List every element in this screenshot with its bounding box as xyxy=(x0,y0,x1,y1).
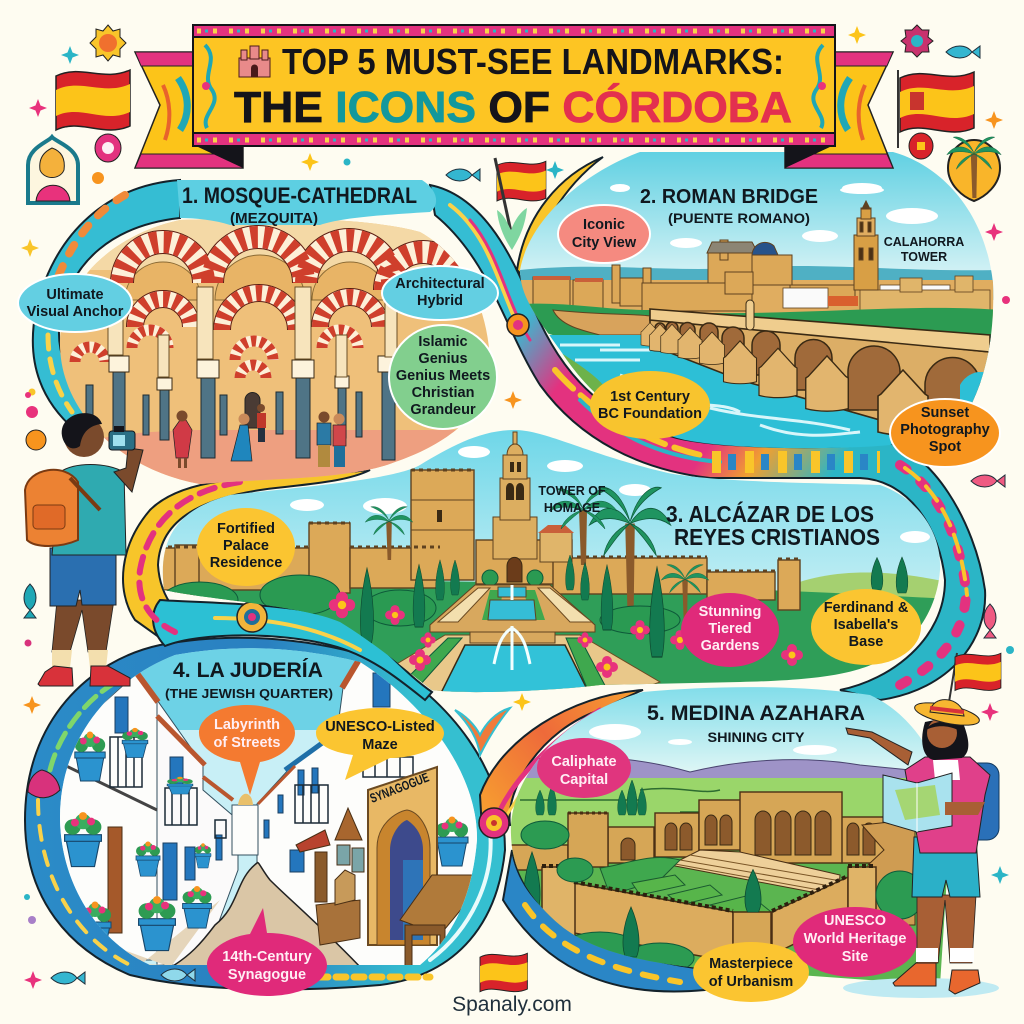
heading: 5. Medina Azahara: 5. MEDINA AZAHARA xyxy=(647,702,865,725)
backpack xyxy=(966,763,999,840)
callout: Fortified Palace Residence: Palace xyxy=(223,538,269,554)
banner side scrolls xyxy=(202,45,826,128)
callout: 1st Century BC Foundation xyxy=(590,371,710,439)
callout: Islamic Genius Meets Christian Grandeur: Christian xyxy=(412,385,474,401)
callout: Islamic Genius Meets Christian Grandeur: Genius xyxy=(418,351,468,367)
scene: ruins xyxy=(510,687,946,980)
traveller with map xyxy=(843,698,999,998)
callout: Ultimate Visual Anchor xyxy=(18,274,132,332)
callout: Fortified Palace Residence: Fortified xyxy=(217,521,275,537)
callout: Masterpiece of Urbanism: Masterpiece xyxy=(709,956,793,972)
callout: Islamic Genius Meets Christian Grandeur: Islamic xyxy=(418,334,468,350)
callout: Iconic City View: City View xyxy=(572,235,637,251)
callout: Architectural Hybrid xyxy=(382,266,498,320)
callout: UNESCO-Listed Maze xyxy=(316,708,444,780)
camera xyxy=(109,426,135,450)
icon: fish bottom xyxy=(161,969,195,981)
ribbon tails xyxy=(135,52,893,168)
pots xyxy=(75,732,105,781)
title text: TOP 5 MUST-SEE LANDMARKS: xyxy=(282,41,784,82)
icon: palm medallion xyxy=(947,137,1001,201)
ribbon: panel 3 lower teal xyxy=(153,600,432,700)
bushes xyxy=(162,570,680,634)
callout: Labyrinth of Streets: of Streets xyxy=(214,735,280,751)
callout: Ultimate Visual Anchor: Ultimate xyxy=(46,287,104,303)
label: Calahorra Tower: CALAHORRA xyxy=(884,235,964,249)
flag: center xyxy=(495,158,546,250)
ribbon: panel 3 yellow xyxy=(123,470,370,645)
tower and gardens xyxy=(568,813,608,867)
crumbling wall xyxy=(862,820,915,925)
callout: Caliphate Capital: Capital xyxy=(560,772,608,788)
icon: round medallion xyxy=(95,134,121,162)
callout: Iconic City View xyxy=(558,205,650,263)
Calahorra tower xyxy=(854,201,878,290)
callout: Sunset Photography Spot xyxy=(890,399,1000,467)
heading: 5. Medina Azahara: SHINING CITY xyxy=(708,730,804,745)
callout: Stunning Tiered Gardens xyxy=(681,593,779,667)
callout: Fortified Palace Residence: Residence xyxy=(210,555,282,571)
hand on map xyxy=(945,802,985,815)
legs xyxy=(917,895,976,963)
title banner xyxy=(135,25,893,168)
callout: 14th-Century Synagogue: Synagogue xyxy=(228,967,306,983)
callout: Architectural Hybrid: Hybrid xyxy=(417,293,463,309)
callout: Sunset Photography Spot: Photography xyxy=(900,422,990,438)
icon: small red medallion xyxy=(909,133,933,159)
heading: 5. Medina Azahara xyxy=(647,702,865,745)
callout: Masterpiece of Urbanism: of Urbanism xyxy=(709,974,793,990)
flag: right of panel 5 xyxy=(949,653,1001,702)
heading band and title: 1. Mosque-Cathedral xyxy=(177,180,436,227)
callout: 14th-Century Synagogue xyxy=(207,908,327,996)
callout: UNESCO World Heritage Site: World Heritage xyxy=(804,931,906,947)
columns xyxy=(86,372,395,460)
trees xyxy=(521,821,924,973)
heading: 4. La Judería xyxy=(165,659,333,701)
icon: fish lower right xyxy=(984,604,996,638)
left houses xyxy=(60,674,156,960)
label: Tower of Homage: TOWER OF xyxy=(538,484,606,498)
tourists xyxy=(173,404,346,468)
bridge xyxy=(641,300,990,435)
street xyxy=(173,862,363,970)
title text: THE ICONS OF CÓRDOBA xyxy=(234,82,792,132)
legs and shoes xyxy=(38,600,130,686)
head xyxy=(64,417,104,457)
ornament: ribbon medallions xyxy=(28,314,529,838)
icon: ornaments top right xyxy=(901,25,933,57)
ribbon: panel 5 orange xyxy=(480,690,643,830)
shirt xyxy=(52,464,126,555)
callout: Fortified Palace Residence xyxy=(197,508,295,586)
scene: Córdoba skyline and bridge xyxy=(510,150,1000,455)
callout: Stunning Tiered Gardens: Gardens xyxy=(701,638,759,654)
callout: Caliphate Capital: Caliphate xyxy=(551,754,617,770)
awning and shop items xyxy=(296,808,473,975)
palms xyxy=(589,487,671,617)
map xyxy=(883,773,952,832)
callout: Stunning Tiered Gardens: Tiered xyxy=(708,621,752,637)
callout: 1st Century BC Foundation: 1st Century xyxy=(610,389,690,405)
scene: Alcázar and gardens xyxy=(162,430,940,692)
head and hair xyxy=(922,715,968,760)
callout: Labyrinth of Streets xyxy=(199,705,295,795)
icon: sun xyxy=(90,25,126,61)
label: Calahorra Tower xyxy=(884,235,964,264)
flag: bottom xyxy=(480,953,527,992)
callout: Architectural Hybrid: Architectural xyxy=(395,276,485,292)
heading: 3. Alcázar de los Reyes Cristianos: 3. ALCÁZAR DE LOS xyxy=(666,500,874,527)
far house xyxy=(232,805,258,855)
heading: 3. Alcázar de los Reyes Cristianos: REYES CRISTIANOS xyxy=(674,524,880,550)
terraces and pools xyxy=(430,585,595,632)
heading band and title: 1. Mosque-Cathedral: (MEZQUITA) xyxy=(230,210,318,227)
arm xyxy=(846,728,912,765)
heading: 4. La Judería: 4. LA JUDERÍA xyxy=(173,659,323,682)
label: Tower of Homage xyxy=(538,484,606,515)
icon: fish top right xyxy=(946,46,980,58)
arm xyxy=(114,448,143,492)
callout: Sunset Photography Spot: Sunset xyxy=(921,405,969,421)
decorative ribbon system xyxy=(25,157,985,992)
callout: 1st Century BC Foundation: BC Foundation xyxy=(598,406,702,422)
stairs xyxy=(674,850,840,892)
heading band and title: 1. Mosque-Cathedral: 1. MOSQUE-CATHEDRAL xyxy=(182,183,417,208)
icon: castle xyxy=(239,46,270,77)
panel: 4 La Judería xyxy=(40,640,490,996)
icon: fish left xyxy=(24,584,36,618)
ribbon: main winding band xyxy=(430,185,985,700)
footer: source: Spanaly.com xyxy=(452,993,572,1016)
callout: UNESCO World Heritage Site: Site xyxy=(842,949,868,965)
hat xyxy=(913,698,981,730)
heading: 2. Roman Bridge: (PUENTE ROMANO) xyxy=(668,210,810,226)
vaults xyxy=(125,255,388,300)
icon: portrait xyxy=(28,137,78,203)
callout: Islamic Genius Meets Christian Grandeur xyxy=(389,325,497,429)
ribbon: panel 5 blue xyxy=(503,850,705,992)
callout: UNESCO-Listed Maze: Maze xyxy=(362,737,398,753)
callout: Islamic Genius Meets Christian Grandeur: Genius Meets xyxy=(396,368,490,384)
buildings xyxy=(533,240,855,311)
flag: top right xyxy=(898,70,974,148)
label: Tower of Homage: HOMAGE xyxy=(544,501,600,515)
yellow swoosh beside panel 2 xyxy=(517,157,603,285)
shoes xyxy=(893,963,980,994)
callout: Ferdinand & Isabella's Base: Isabella's xyxy=(834,617,898,633)
belfry xyxy=(493,432,537,559)
callout: Iconic City View: Iconic xyxy=(583,217,625,233)
backpack xyxy=(25,470,78,546)
panel: 1 Mosque-Cathedral xyxy=(18,180,500,490)
label: Calahorra Tower: TOWER xyxy=(901,250,947,264)
balconies xyxy=(110,737,413,838)
callout: Caliphate Capital xyxy=(537,738,631,798)
callout: UNESCO World Heritage Site: UNESCO xyxy=(824,913,886,929)
jacket and tee xyxy=(905,757,990,853)
flag: top left xyxy=(56,70,130,130)
icon: fish right xyxy=(971,475,1005,487)
callout: Stunning Tiered Gardens: Stunning xyxy=(699,604,761,620)
ribbon: panel 4 ring xyxy=(25,638,505,989)
scene: mezquita interior xyxy=(50,210,500,490)
callout: UNESCO World Heritage Site xyxy=(793,907,917,977)
heading: 2. Roman Bridge: 2. ROMAN BRIDGE xyxy=(640,186,818,208)
windows and doors xyxy=(115,673,390,900)
front walls xyxy=(574,883,733,962)
icon: fish lower left xyxy=(51,972,85,984)
heading: 3. Alcázar de los Reyes Cristianos xyxy=(666,500,880,550)
callout: Ferdinand & Isabella's Base xyxy=(811,589,921,665)
shorts xyxy=(50,548,116,606)
icon: fish center xyxy=(446,169,480,181)
scene: whitewashed street xyxy=(60,648,478,965)
ribbon: panel 1 teal xyxy=(33,180,180,430)
back walls xyxy=(510,792,886,870)
callout: Masterpiece of Urbanism xyxy=(693,942,809,1002)
callout: 14th-Century Synagogue: 14th-Century xyxy=(222,949,312,965)
arch layer two xyxy=(135,293,380,330)
heading: 2. Roman Bridge xyxy=(640,186,818,226)
synagogue doorway: SYNAGOGUE xyxy=(368,769,431,806)
right houses xyxy=(257,660,490,970)
arch layer one xyxy=(122,237,461,290)
arch layer three xyxy=(75,330,358,378)
callout: Ferdinand & Isabella's Base: Base xyxy=(849,634,883,650)
panel: 3 Alcázar de los Reyes Cristianos xyxy=(162,430,940,692)
panel: 5 Medina Azahara xyxy=(500,680,960,1002)
shorts xyxy=(912,837,980,897)
synagogue doorway xyxy=(368,767,437,945)
panel: 2 Roman Bridge xyxy=(510,150,1000,467)
callout: UNESCO-Listed Maze: UNESCO-Listed xyxy=(325,719,435,735)
callout: Labyrinth of Streets: Labyrinth xyxy=(214,717,280,733)
photographer xyxy=(25,413,143,686)
callout: Ferdinand & Isabella's Base: Ferdinand & xyxy=(824,600,909,616)
callout: Islamic Genius Meets Christian Grandeur: Grandeur xyxy=(410,402,476,418)
callout: Sunset Photography Spot: Spot xyxy=(929,439,961,455)
callout: Ultimate Visual Anchor: Visual Anchor xyxy=(27,304,124,320)
title text xyxy=(234,41,792,132)
ribbon ornaments xyxy=(38,195,967,982)
heading: 4. La Judería: (THE JEWISH QUARTER) xyxy=(165,686,333,701)
